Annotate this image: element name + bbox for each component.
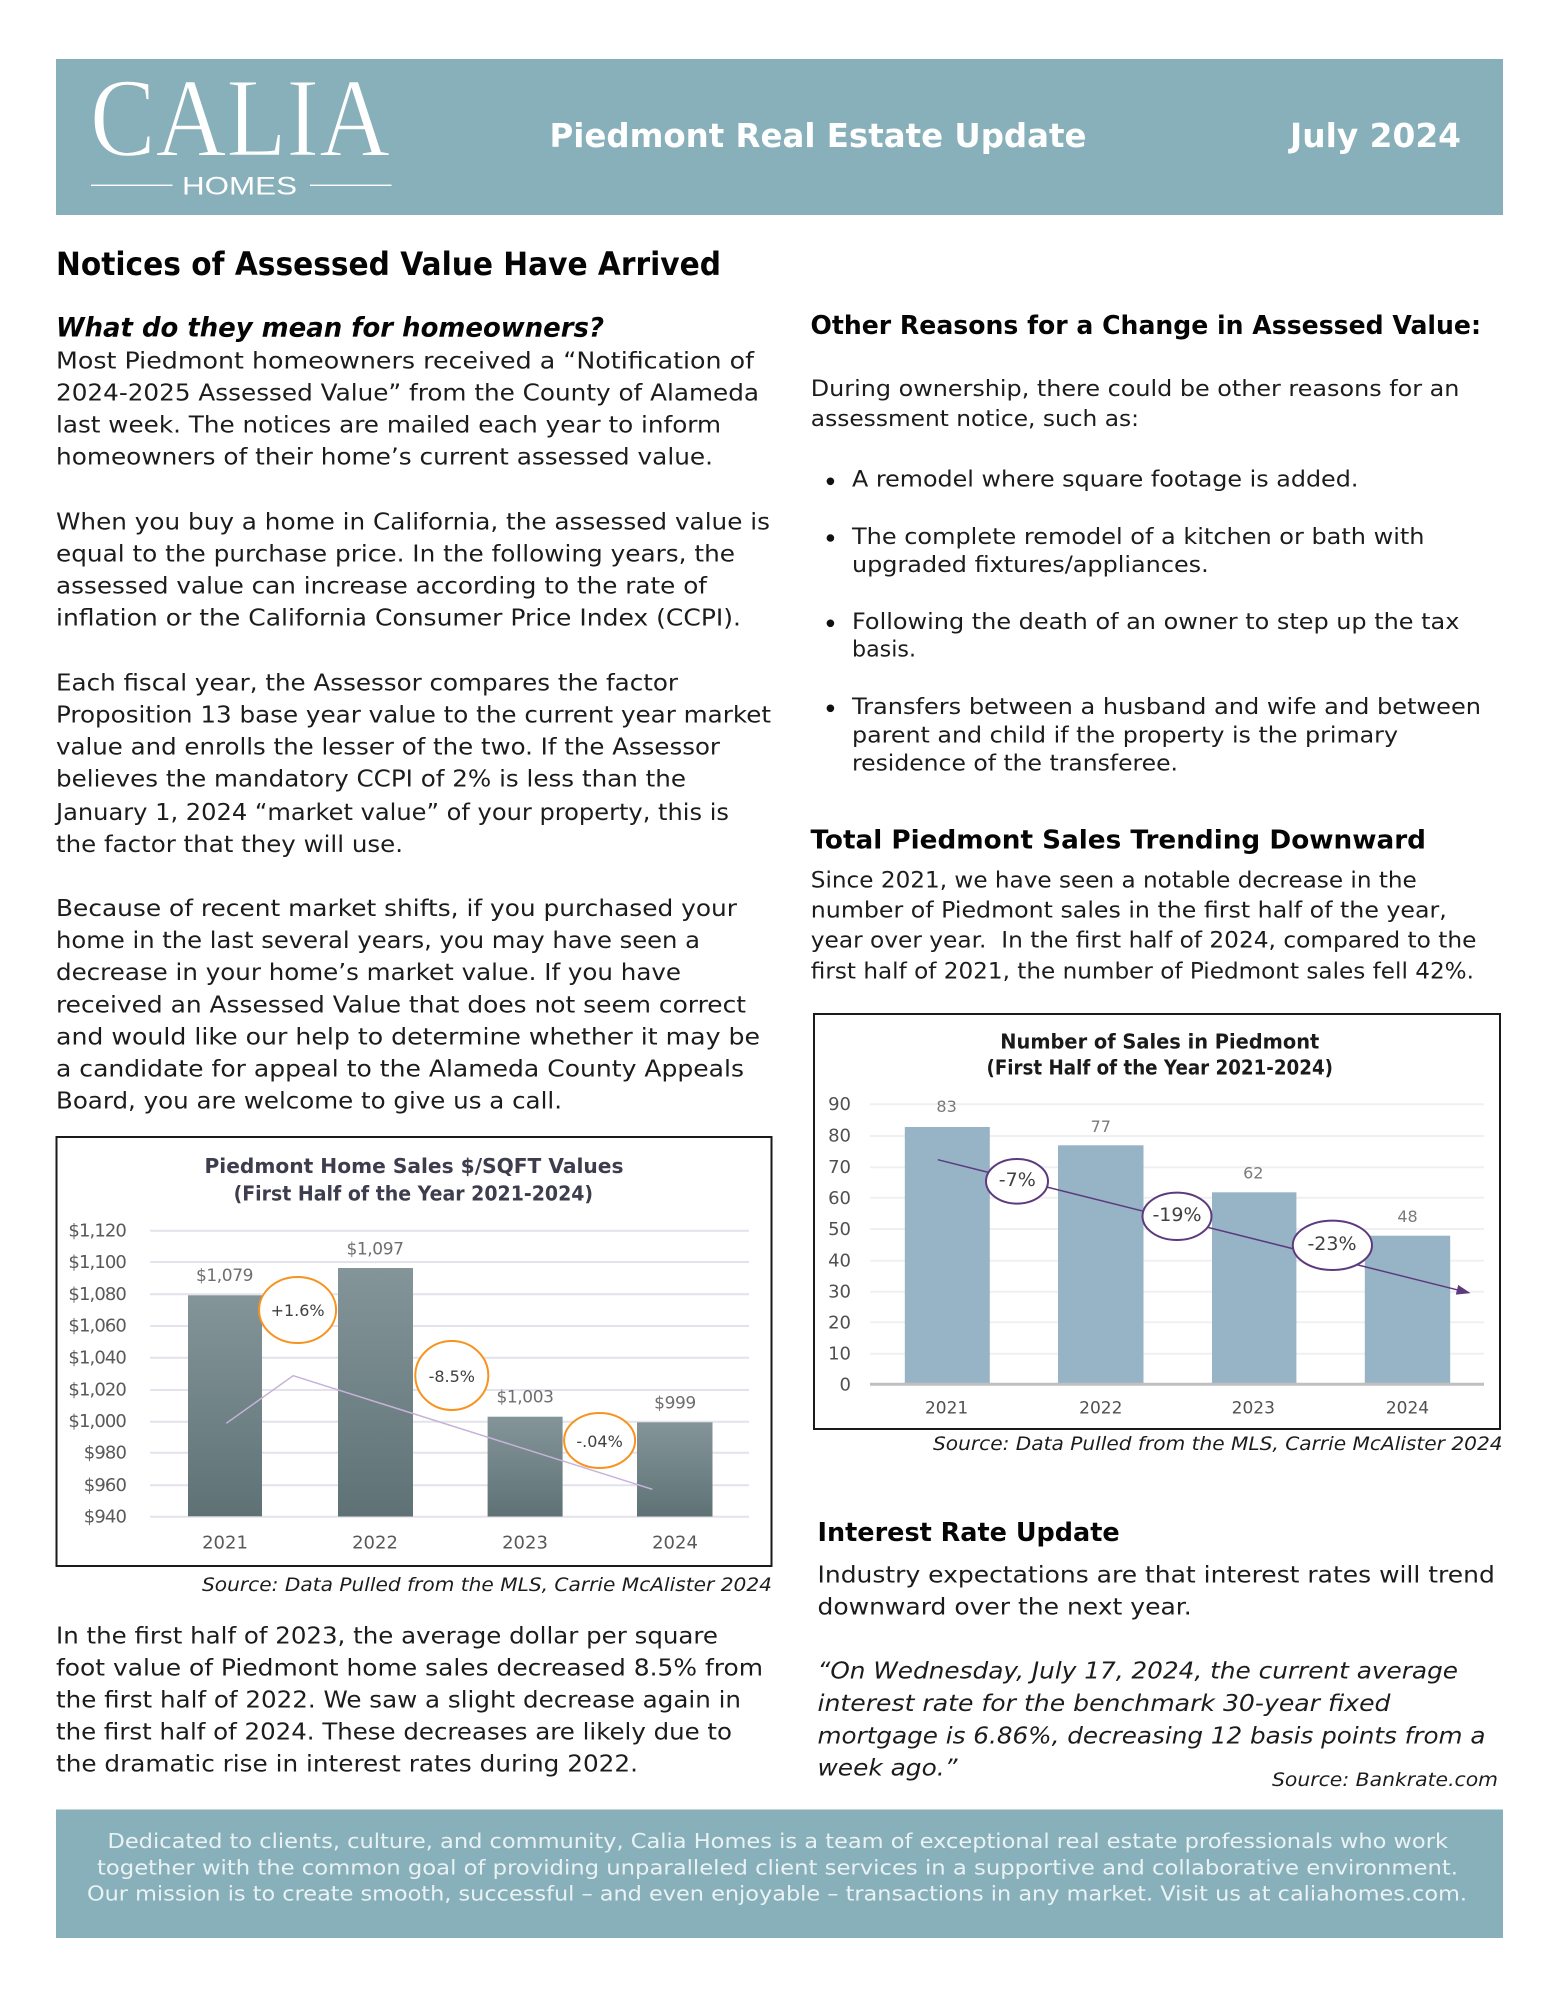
y axis labels: 20 — [828, 1312, 851, 1334]
chart title — [986, 1029, 1333, 1080]
bullet list: Transfers between a husband and wife and between — [851, 695, 1481, 720]
value labels: $1,003 — [496, 1388, 554, 1408]
paragraph: fiscal year: value and enrolls the lesser of the two. If the Assessor — [56, 735, 721, 761]
paragraph: during ownership — [811, 377, 1459, 432]
y axis labels: 10 — [828, 1344, 851, 1364]
footer text: Dedicated to clients, culture, and community, Calia Homes is a team of exceptional real estate professionals who work — [108, 1829, 1448, 1853]
year labels: 2024 — [1386, 1398, 1429, 1418]
callout: +1.6% — [259, 1277, 336, 1343]
panel: dollar per square foot chart — [56, 1137, 772, 1566]
quote: interest rate: week ago.” — [818, 1755, 959, 1781]
bullet list: parent and child if the property is the primary — [852, 724, 1398, 749]
callout: -23% — [1293, 1221, 1372, 1270]
paragraph: first half of 2023: foot value of Piedmont home sales decreased 8.5% from — [56, 1656, 763, 1682]
y axis labels: $1,040 — [68, 1348, 126, 1368]
y axis labels: 80 — [828, 1126, 851, 1146]
quote: interest rate — [818, 1659, 1486, 1781]
bars — [905, 1127, 1450, 1384]
footer text: Our mission is to create smooth, successful – and even enjoyable – transactions in any market. Visit us at caliahomes.com. — [87, 1882, 1467, 1906]
y axis labels — [828, 1094, 851, 1396]
bars — [188, 1268, 712, 1516]
quote: interest rate: interest rate for the benchmark 30-year fixed — [818, 1691, 1391, 1717]
logo: Calia Homes: CALIA — [90, 57, 390, 181]
footer text — [87, 1829, 1467, 1906]
bullet list: The complete remodel of a kitchen or bath with — [851, 525, 1424, 550]
callout: +1.6%: +1.6% — [271, 1301, 325, 1320]
y axis labels: $1,020 — [68, 1380, 126, 1400]
y axis labels: $1,120 — [68, 1220, 126, 1242]
paragraph: first half of 2023: In the first half of 2023, the average dollar per square — [56, 1624, 718, 1650]
callout: -8.5% — [415, 1341, 488, 1410]
paragraph: buying a home: When you buy a home in California, the assessed value is — [56, 510, 770, 536]
paragraph: market shifts: decrease in your home’s market value. If you have — [56, 960, 681, 986]
year labels: 2023 — [1232, 1398, 1275, 1418]
y axis labels: 70 — [828, 1157, 851, 1178]
paragraph: during ownership: assessment notice, such as: — [811, 407, 1139, 432]
paragraph: buying a home: inflation or the California Consumer Price Index (CCPI). — [56, 606, 741, 632]
paragraph: first half of 2023 — [56, 1624, 763, 1778]
paragraph: first half of 2023: the first half of 2022. We saw a slight decrease again in — [56, 1688, 741, 1714]
paragraph: market shifts — [56, 896, 760, 1115]
paragraph: market shifts: a candidate for appeal to the Alameda County Appeals — [56, 1057, 744, 1083]
year labels: 2021 — [202, 1532, 248, 1553]
value labels: 77 — [1091, 1117, 1111, 1136]
year labels: 2022 — [352, 1532, 398, 1553]
paragraph: first half of 2023: the dramatic rise in interest rates during 2022. — [56, 1752, 638, 1778]
year labels — [925, 1398, 1429, 1418]
paragraph: industry expectations: downward over the next year. — [818, 1595, 1192, 1621]
y axis labels: 0 — [840, 1374, 851, 1396]
footer text: together with the common goal of providing unparalleled client services in a supportive and collaborative environment. — [97, 1856, 1458, 1880]
value labels: 48 — [1397, 1207, 1418, 1226]
bullet list — [827, 468, 1481, 777]
paragraph: fiscal year: the factor that they will use. — [56, 832, 403, 858]
chart title: (First Half of the Year 2021-2024) — [986, 1056, 1333, 1080]
callout: -19%: -19% — [1152, 1204, 1202, 1226]
logo: Calia Homes: HOMES — [182, 172, 297, 200]
main heading: Notices of Assessed Value Have Arrived — [56, 245, 721, 283]
paragraph: during ownership: During ownership, there could be other reasons for an — [811, 377, 1459, 402]
paragraph: industry expectations — [818, 1563, 1495, 1621]
header banner — [56, 57, 1503, 215]
source: first chart: Source: Data Pulled from the MLS, Carrie McAlister 2024 — [202, 1574, 772, 1596]
paragraph: since 2021: first half of 2021, the number of Piedmont sales fell 42%. — [811, 959, 1474, 984]
chart title — [204, 1154, 624, 1206]
year labels — [202, 1532, 698, 1553]
paragraph: fiscal year — [54, 671, 771, 858]
y axis labels: $940 — [84, 1506, 126, 1528]
header title: Piedmont Real Estate Update — [550, 116, 1086, 155]
y axis labels: $1,000 — [68, 1411, 126, 1432]
paragraph: buying a home: equal to the purchase price. In the following years, the — [56, 542, 735, 568]
chart title: Number of Sales in Piedmont — [1000, 1029, 1320, 1053]
paragraph: buying a home: assessed value can increase according to the rate of — [56, 574, 708, 600]
footer banner — [56, 1810, 1503, 1938]
value labels: $1,097 — [346, 1240, 404, 1260]
y axis labels: 30 — [828, 1282, 851, 1302]
paragraph: notification — [56, 348, 759, 471]
paragraph: buying a home — [56, 510, 770, 632]
source: second chart: Source: Data Pulled from the MLS, Carrie McAlister 2024 — [933, 1433, 1503, 1455]
paragraph: market shifts: Because of recent market shifts, if you purchased your — [56, 896, 738, 922]
y axis labels: $1,080 — [68, 1284, 126, 1305]
paragraph: since 2021: number of Piedmont sales in the first half of the year, — [811, 899, 1447, 924]
y axis labels: $960 — [84, 1475, 126, 1496]
bullet list: residence of the transferee. — [852, 752, 1178, 777]
bullet list: A remodel where square footage is added. — [852, 468, 1358, 493]
callout: -.04% — [564, 1413, 635, 1468]
paragraph: market shifts: received an Assessed Value that does not seem correct — [56, 993, 746, 1019]
arrow: downward trend — [938, 1160, 1469, 1293]
trend line — [226, 1376, 652, 1489]
paragraph: since 2021: Since 2021, we have seen a notable decrease in the — [811, 869, 1417, 894]
year labels: 2024 — [652, 1532, 698, 1553]
paragraph: market shifts: Board, you are welcome to give us a call. — [56, 1089, 562, 1115]
y axis labels — [68, 1220, 126, 1528]
callout: -19% — [1142, 1193, 1212, 1240]
paragraph: industry expectations: Industry expectations are that interest rates will trend — [818, 1563, 1495, 1589]
paragraph: fiscal year: Each fiscal year, the Assessor compares the factor — [56, 671, 679, 697]
paragraph: since 2021: year over year. In the first half of 2024, compared to the — [811, 929, 1476, 954]
value labels: $1,079 — [196, 1266, 253, 1286]
heading: total sales: Total Piedmont Sales Trending Downward — [810, 825, 1426, 855]
y axis labels: 50 — [828, 1219, 851, 1240]
source: bankrate: Source: Bankrate.com — [1272, 1769, 1498, 1791]
header date: July 2024 — [1288, 116, 1461, 155]
year labels: 2022 — [1079, 1398, 1122, 1418]
y axis labels: 40 — [828, 1250, 851, 1272]
value labels — [196, 1240, 696, 1414]
paragraph: market shifts: and would like our help to determine whether it may be — [56, 1025, 760, 1051]
panel: number of sales chart — [814, 1014, 1500, 1429]
quote: interest rate: “On Wednesday, July 17, 2024, the current average — [818, 1659, 1458, 1685]
y axis labels: $980 — [84, 1442, 126, 1464]
callout: -7%: -7% — [999, 1169, 1036, 1191]
paragraph: notification: last week. The notices are mailed each year to inform — [56, 413, 721, 439]
paragraph: first half of 2023: the first half of 2024. These decreases are likely due to — [56, 1720, 732, 1746]
subheading: what do they mean: What do they mean for homeowners? — [56, 313, 604, 344]
callout: -23%: -23% — [1307, 1233, 1357, 1255]
year labels: 2021 — [925, 1398, 968, 1418]
callout: -8.5%: -8.5% — [429, 1367, 475, 1386]
paragraph: fiscal year: believes the mandatory CCPI of 2% is less than the — [56, 767, 686, 793]
chart title: (First Half of the Year 2021-2024) — [234, 1182, 593, 1206]
paragraph: notification: homeowners of their home’s current assessed value. — [56, 445, 713, 471]
value labels — [936, 1097, 1418, 1226]
y axis labels: 90 — [828, 1094, 851, 1115]
quote: interest rate: mortgage is 6.86%, decreasing 12 basis points from a — [818, 1723, 1486, 1749]
year labels: 2023 — [502, 1532, 548, 1553]
bullet list: basis. — [852, 638, 916, 663]
bullet list: upgraded fixtures/appliances. — [852, 553, 1209, 578]
callout: -.04%: -.04% — [576, 1432, 623, 1451]
y axis labels: $1,100 — [68, 1252, 126, 1273]
value labels: 83 — [936, 1097, 957, 1116]
paragraph: since 2021 — [811, 869, 1476, 984]
bullet list: Following the death of an owner to step up the tax — [852, 610, 1459, 635]
paragraph: market shifts: home in the last several years, you may have seen a — [56, 928, 700, 954]
paragraph: fiscal year: January 1, 2024 “market value” of your property, this is — [54, 800, 729, 826]
chart title: Piedmont Home Sales $/SQFT Values — [204, 1154, 624, 1178]
value labels: $999 — [654, 1394, 696, 1414]
paragraph: notification: 2024-2025 Assessed Value” from the County of Alameda — [56, 381, 759, 407]
paragraph: fiscal year: Proposition 13 base year value to the current year market — [56, 703, 771, 729]
y axis labels: 60 — [828, 1188, 851, 1209]
y axis labels: $1,060 — [68, 1316, 126, 1336]
callout: -7% — [986, 1159, 1048, 1204]
heading: interest rate update: Interest Rate Update — [818, 1518, 1120, 1548]
value labels: 62 — [1243, 1164, 1263, 1182]
heading: other reasons: Other Reasons for a Change in Assessed Value: — [810, 311, 1481, 341]
paragraph: notification: Most Piedmont homeowners received a “Notification of — [56, 348, 755, 374]
